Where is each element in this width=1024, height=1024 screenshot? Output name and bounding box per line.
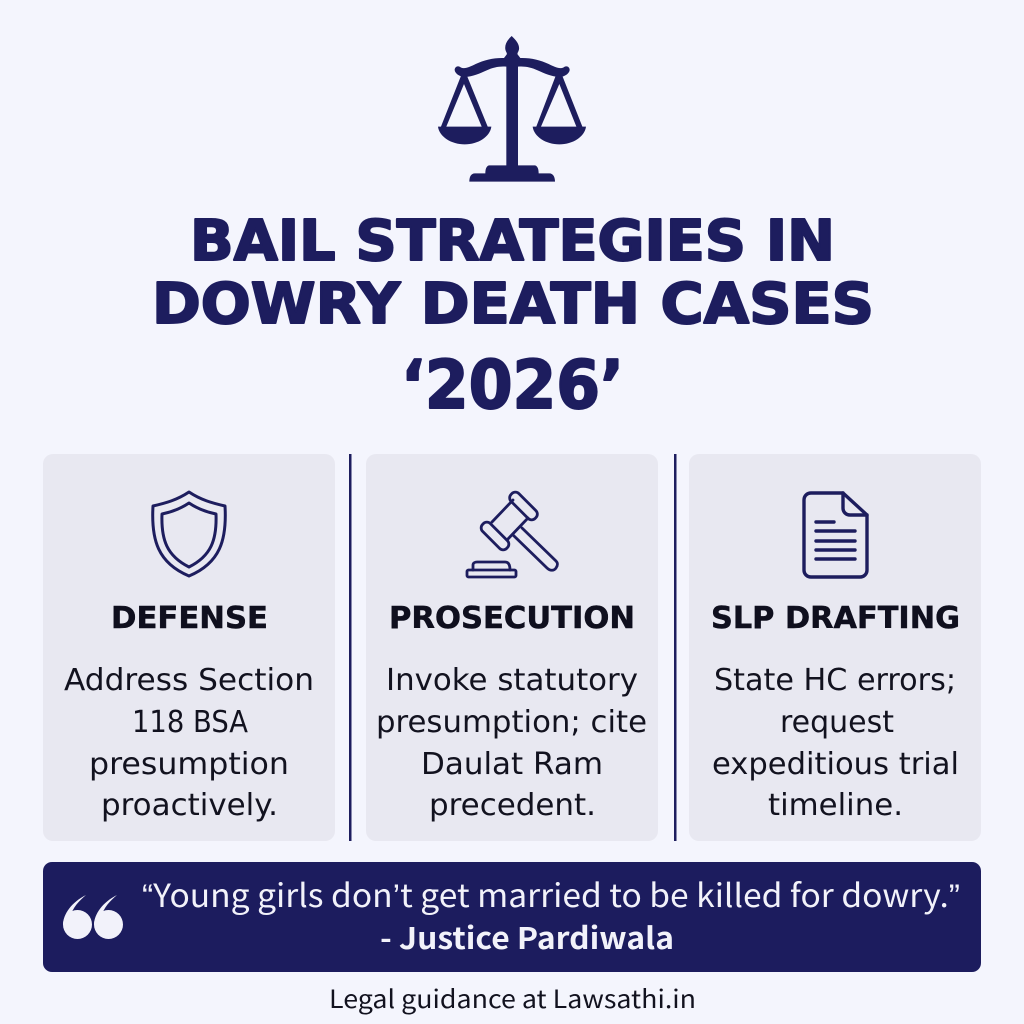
- text: defense body: proactively.: [101, 788, 278, 823]
- text: slp drafting body: expeditious trial: [712, 747, 959, 782]
- footer: Legal guidance at Lawsathi.in: [329, 980, 696, 1016]
- text: slp drafting body: State HC errors;: [714, 663, 956, 698]
- icon: document: [804, 493, 867, 577]
- heading: defense: DEFENSE: [111, 601, 268, 636]
- text: prosecution body: precedent.: [429, 788, 596, 823]
- text: defense body: 118 BSA: [132, 705, 248, 740]
- heading: prosecution: PROSECUTION: [389, 601, 635, 636]
- text: defense body: Address Section: [64, 663, 314, 698]
- icon: quotation mark: [63, 895, 123, 939]
- panel: slp drafting: [689, 454, 981, 841]
- text: quote: “Young girls don ’t get married to be killed for dowry. ”: [142, 871, 960, 917]
- text: prosecution body: Invoke statutory: [386, 663, 638, 698]
- heading: slp drafting: SLP DRAFTING: [711, 601, 960, 636]
- text: prosecution body: Daulat Ram: [421, 747, 603, 782]
- icon: gavel: [467, 490, 558, 577]
- callout: quote banner: [43, 862, 981, 972]
- text: prosecution body: [376, 663, 647, 823]
- text: slp drafting body: timeline.: [768, 788, 903, 823]
- title: ‘2026’: [401, 346, 624, 424]
- text: slp drafting body: [712, 663, 959, 823]
- panel: prosecution: [366, 454, 658, 841]
- icon: shield: [153, 492, 225, 576]
- icon: scales of justice: [438, 36, 586, 182]
- text: defense body: [64, 663, 314, 823]
- divider: [674, 454, 676, 841]
- title: DOWRY DEATH CASES: [152, 272, 874, 337]
- divider: [349, 454, 352, 841]
- text: attribution: - Justice Pardiwala: [380, 914, 674, 958]
- text: slp drafting body: request: [780, 705, 894, 740]
- panel: defense: [43, 454, 335, 841]
- title: BAIL STRATEGIES IN: [190, 209, 835, 274]
- title: [152, 209, 874, 424]
- text: prosecution body: presumption; cite: [376, 705, 647, 740]
- text: defense body: presumption: [89, 747, 289, 782]
